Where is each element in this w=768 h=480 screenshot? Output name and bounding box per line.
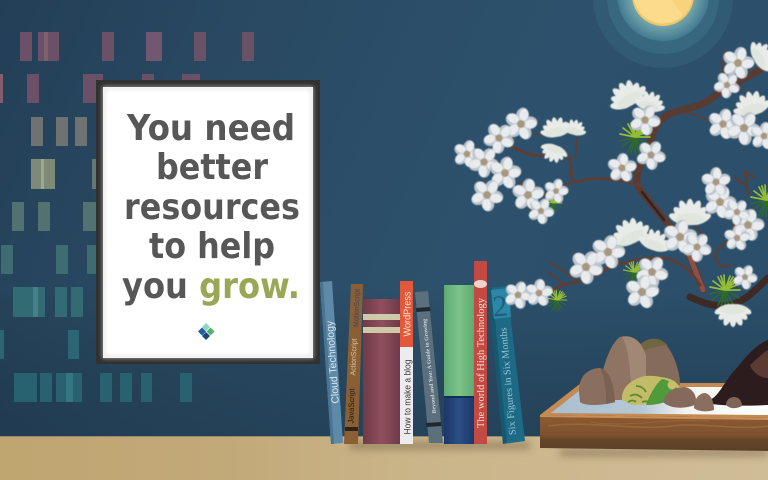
book: Six Figures in Six Months: 2: [491, 289, 509, 324]
book: JavaScript ActionScript MotionScript: ActionScript: [348, 337, 359, 376]
tall rock: [600, 336, 646, 400]
poster headline: [122, 108, 300, 307]
poster headline: You need: [126, 108, 295, 149]
book: Cloud Technology: Cloud Technology: [324, 320, 342, 404]
inner paper shadow: [104, 88, 312, 357]
book: green and blue: [444, 285, 474, 444]
book: maroon with cream bands: [363, 299, 400, 444]
bonsai pine tufts: [544, 122, 768, 311]
frame: [96, 80, 320, 364]
bonsai fan blossoms: [536, 35, 768, 327]
tray top surface: [540, 383, 768, 418]
book: WordPress How to make a blog: WordPress: [402, 292, 414, 336]
book: Beyond and You: A Guide to Growing: Beyond and You: A Guide to Growing: [422, 318, 438, 414]
bonsai branches: [484, 50, 768, 306]
book: JavaScript ActionScript MotionScript: MotionScript: [351, 288, 362, 327]
book: Six Figures in Six Months: Six Figures in Six Months: [498, 327, 519, 435]
bonsai garden tray: [540, 336, 768, 451]
building windows pattern: [0, 32, 254, 402]
tray front wood: [540, 415, 768, 451]
dark rock: [710, 340, 768, 406]
book: WordPress How to make a blog: How to make a blog: [402, 360, 414, 434]
floor: [0, 436, 768, 480]
book: JavaScript ActionScript MotionScript: JavaScript: [346, 388, 357, 424]
book: The world of High Technology: [474, 261, 487, 444]
floor shadows: [350, 442, 768, 456]
poster headline: resources: [124, 187, 300, 228]
book: WordPress How to make a blog: [400, 281, 414, 444]
moss shrub: [622, 376, 680, 405]
poster headline: you grow.: [122, 266, 300, 307]
moon with halo: [593, 0, 733, 68]
framed poster: [96, 80, 320, 364]
pebble rocks: [663, 387, 696, 408]
left small rock: [579, 368, 615, 405]
book: Beyond and You: A Guide to Growing: [415, 291, 443, 443]
back rock: [638, 339, 680, 388]
poster headline: better: [156, 147, 268, 188]
poster paper: [103, 87, 313, 358]
book: The world of High Technology: The world of High Technology: [476, 297, 487, 428]
poster headline: to help: [149, 226, 275, 267]
bonsai flowers: [449, 43, 768, 314]
icon: diamond logo: [198, 323, 214, 340]
book: JavaScript ActionScript MotionScript: [344, 284, 363, 444]
sand: [551, 387, 768, 415]
book: Six Figures in Six Months: [488, 286, 525, 444]
book: Cloud Technology: [320, 281, 343, 444]
